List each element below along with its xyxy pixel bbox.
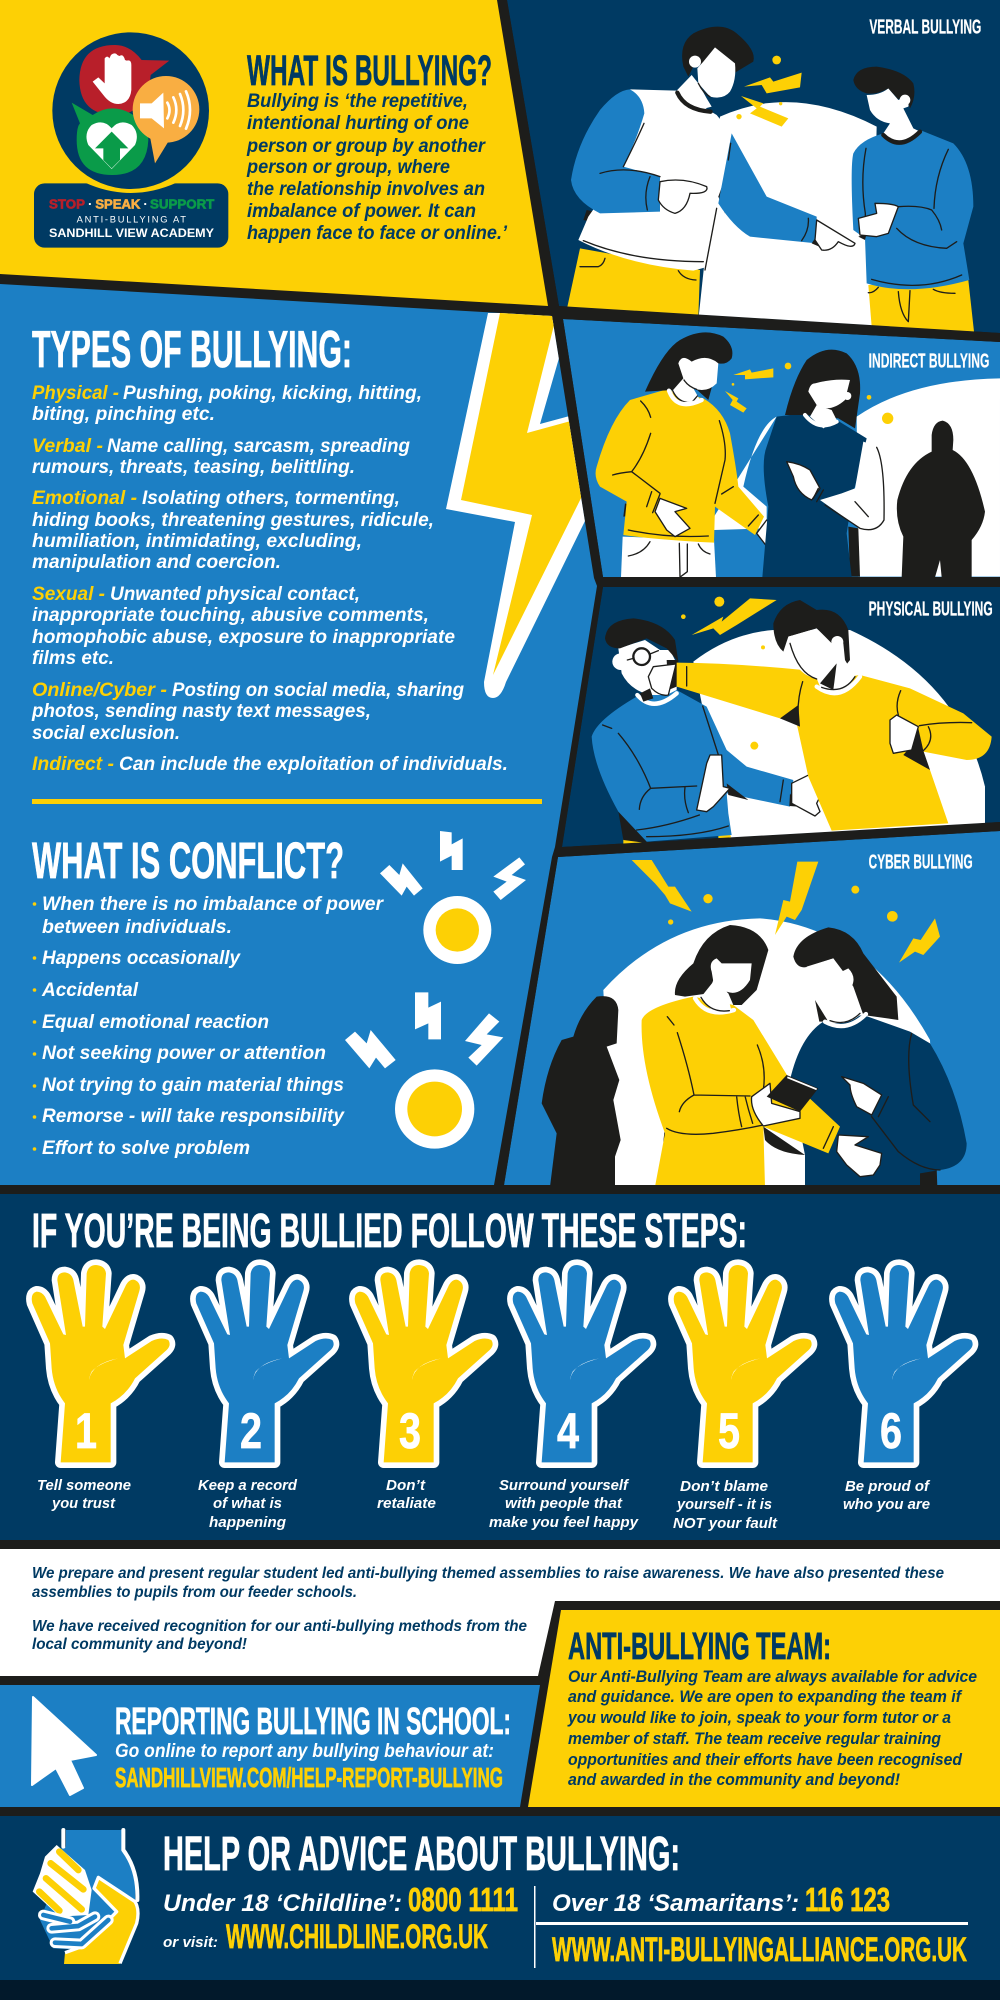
- step 4: 4: [557, 1403, 579, 1459]
- contact: samaritans: Over 18 ‘Samaritans’:: [552, 1890, 799, 1917]
- step 3: 3: [399, 1403, 421, 1459]
- text: online cyber: Online/Cyber -: [32, 680, 167, 701]
- text: emotional: hiding books, threatening gestures, ridicule,: [32, 510, 434, 531]
- step 2: happening: [209, 1514, 286, 1531]
- list: conflict points: Not seeking power or attention: [42, 1043, 326, 1064]
- panel: verbal bullying illustration: [507, 0, 1000, 333]
- step 4: [489, 1265, 651, 1531]
- step 4: Surround yourself: [499, 1477, 630, 1494]
- text: physical: [32, 383, 422, 425]
- step 2: [196, 1265, 334, 1531]
- panel: assemblies text: We have received recognition for our anti-bullying methods from the: [32, 1618, 527, 1635]
- logo: stop speak support: ·: [88, 197, 92, 212]
- text: emotional: Isolating others, tormenting,: [142, 488, 400, 509]
- panel: assemblies text: local community and beyond!: [32, 1636, 247, 1653]
- step 5: yourself - it is: [676, 1496, 772, 1513]
- text: bullying definition: intentional hurting of one: [247, 113, 469, 134]
- text: sexual: [32, 584, 455, 669]
- text: bullying definition: person or group, where: [246, 157, 450, 178]
- text: indirect: Can include the exploitation of individuals.: [119, 754, 508, 775]
- text: physical: biting, pinching etc.: [32, 404, 215, 425]
- text: bullying definition: [246, 91, 508, 244]
- text: bullying definition: Bullying is ‘the repetitive,: [247, 91, 468, 112]
- logo: stop speak support: ·: [143, 197, 148, 212]
- text: emotional: manipulation and coercion.: [32, 552, 281, 573]
- list: conflict points: Happens occasionally: [42, 948, 241, 969]
- step 3: Don’t: [386, 1477, 426, 1494]
- contact: childline: or visit:: [163, 1935, 218, 1951]
- text: sexual: films etc.: [32, 648, 114, 669]
- contact: samaritans: [552, 1881, 890, 1918]
- text: verbal: Verbal -: [32, 436, 103, 457]
- panel: types of bullying and conflict: [0, 284, 610, 1185]
- step 6: 6: [880, 1403, 902, 1459]
- text: report online: Go online to report any bullying behaviour at:: [115, 1741, 494, 1762]
- logo: stop speak support: ANTI-BULLYING AT: [77, 214, 186, 224]
- step 4: make you feel happy: [489, 1514, 639, 1531]
- text: team description: you would like to join, speak to your form tutor or a: [567, 1708, 951, 1727]
- step 2: of what is: [213, 1495, 282, 1512]
- text: online cyber: [31, 680, 464, 744]
- logo: stop speak support: SPEAK: [95, 197, 141, 212]
- logo: stop speak support: SUPPORT: [150, 197, 214, 212]
- text: bullying definition: the relationship involves an: [247, 179, 485, 200]
- step 6: who you are: [843, 1496, 930, 1513]
- logo: stop speak support: STOP: [49, 197, 85, 212]
- list: conflict points: Effort to solve problem: [42, 1138, 250, 1159]
- heading: what is conflict: WHAT IS CONFLICT?: [32, 832, 344, 889]
- step 1: Tell someone: [37, 1477, 131, 1494]
- list: conflict points: Accidental: [41, 980, 139, 1001]
- contact: childline: [163, 1881, 518, 1956]
- heading: what is bullying: WHAT IS BULLYING?: [247, 47, 492, 95]
- heading: anti-bullying team: ANTI-BULLYING TEAM:: [568, 1626, 831, 1668]
- icon: cursor arrow: [32, 1697, 96, 1795]
- panel: assemblies text: [0, 1549, 1000, 1676]
- panel: assemblies text: We prepare and present regular student led anti-bullying themed assemblies to raise awareness. We have also presented these: [32, 1565, 944, 1582]
- panel: cyber bullying illustration: [504, 831, 1000, 1187]
- logo: stop speak support: SANDHILL VIEW ACADEMY: [49, 227, 214, 240]
- step 6: Be proud of: [845, 1478, 931, 1495]
- text: sexual: inappropriate touching, abusive comments,: [32, 605, 429, 626]
- step 5: [673, 1265, 812, 1532]
- list: conflict points: Not trying to gain material things: [42, 1075, 344, 1096]
- list: conflict points: Remorse - will take responsibility: [42, 1106, 345, 1127]
- text: verbal: Name calling, sarcasm, spreading: [107, 436, 410, 457]
- text: online cyber: photos, sending nasty text messages,: [31, 701, 371, 722]
- step 5: 5: [718, 1403, 740, 1459]
- text: emotional: humiliation, intimidating, excluding,: [32, 531, 362, 552]
- list: conflict points: [33, 894, 385, 1159]
- step 1: you trust: [51, 1495, 116, 1512]
- text: team description: [567, 1667, 977, 1789]
- text: team description: Our Anti-Bullying Team are always available for advice: [568, 1667, 977, 1686]
- heading: reporting: REPORTING BULLYING IN SCHOOL:: [115, 1701, 511, 1743]
- text: physical: Physical -: [32, 383, 119, 404]
- text: online cyber: social exclusion.: [32, 723, 180, 744]
- step 1: [32, 1265, 170, 1512]
- text: physical: Pushing, poking, kicking, hitting,: [123, 383, 422, 404]
- list: conflict points: between individuals.: [42, 917, 232, 938]
- text: verbal: [32, 436, 410, 478]
- text: verbal: rumours, threats, teasing, belittling.: [32, 457, 355, 478]
- text: team description: and awarded in the community and beyond!: [568, 1770, 900, 1789]
- text: bullying definition: person or group by another: [246, 136, 487, 157]
- contact: childline: Under 18 ‘Childline’:: [163, 1890, 402, 1917]
- panel: physical bullying illustration: [562, 587, 1000, 847]
- text: sexual: homophobic abuse, exposure to inappropriate: [32, 627, 455, 648]
- panel: reporting bullying in school: [0, 1685, 540, 1807]
- panel: anti-bullying team: [528, 1610, 1000, 1807]
- link: report url: SANDHILLVIEW.COM/HELP-REPORT-BULLYING: [115, 1762, 503, 1793]
- heading: help or advice: HELP OR ADVICE ABOUT BULLYING:: [163, 1828, 680, 1881]
- panel: what is bullying: [0, 0, 548, 306]
- panel: indirect bullying illustration: [563, 319, 1000, 577]
- list: conflict points: Equal emotional reaction: [42, 1012, 269, 1033]
- text: team description: and guidance. We are open to expanding the team if: [568, 1687, 963, 1706]
- icon: conflict burst top: [380, 831, 526, 964]
- icon: large lightning bolt: [446, 313, 585, 698]
- icon: helping hands: [33, 1830, 138, 1964]
- text: team description: member of staff. The team receive regular training: [568, 1729, 942, 1748]
- text: emotional: Emotional -: [32, 488, 137, 509]
- text: online cyber: Posting on social media, sharing: [172, 680, 464, 701]
- step 2: Keep a record: [198, 1477, 298, 1494]
- heading: types of bullying: TYPES OF BULLYING:: [32, 321, 352, 379]
- text: emotional: [32, 488, 434, 573]
- contact: childline: 0800 1111: [408, 1881, 518, 1918]
- divider band around team panel: [0, 1601, 1000, 1816]
- contact: samaritans: 116 123: [805, 1881, 890, 1918]
- panel: help or advice: [0, 1816, 1000, 1980]
- text: indirect: Indirect -: [32, 754, 114, 775]
- list: conflict points: When there is no imbalance of power: [42, 894, 385, 915]
- step 6: [835, 1265, 973, 1513]
- step 2: 2: [240, 1403, 262, 1459]
- icon: conflict burst bottom: [345, 992, 503, 1149]
- step 4: with people that: [505, 1495, 623, 1512]
- text: sexual: Unwanted physical contact,: [110, 584, 360, 605]
- text: bullying definition: happen face to face or online.’: [247, 223, 508, 244]
- footer band: [0, 1980, 1000, 2000]
- step 3: retaliate: [377, 1495, 436, 1512]
- panel: steps to follow: [0, 1194, 1000, 1540]
- text: team description: opportunities and their efforts have been recognised: [568, 1750, 963, 1769]
- step 5: NOT your fault: [673, 1515, 778, 1532]
- text: bullying definition: imbalance of power. It can: [247, 201, 476, 222]
- contact: childline: WWW.CHILDLINE.ORG.UK: [226, 1918, 488, 1956]
- step 5: Don’t blame: [680, 1478, 768, 1495]
- panel: assemblies text: assemblies to pupils from our feeder schools.: [32, 1584, 357, 1601]
- step 1: 1: [75, 1403, 97, 1459]
- text: sexual: Sexual -: [32, 584, 105, 605]
- step 3: [355, 1265, 493, 1512]
- logo: stop speak support: [34, 32, 228, 248]
